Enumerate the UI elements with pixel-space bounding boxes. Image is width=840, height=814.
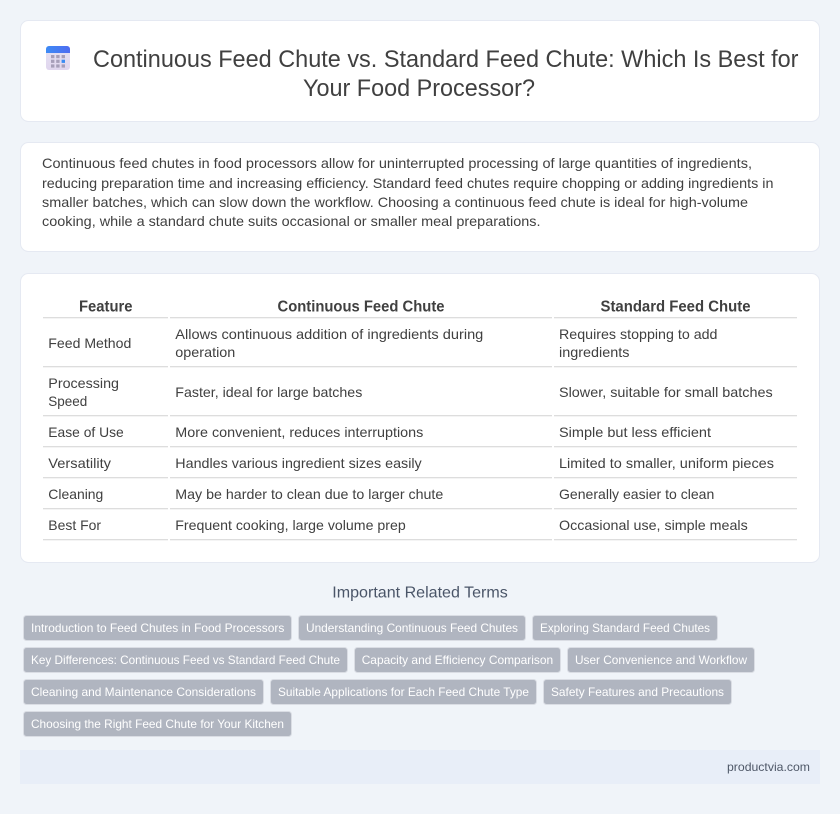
tag: Safety Features and Precautions (551, 685, 724, 699)
row: feed method: Allows continuous addition of ingredients during (175, 326, 483, 342)
text block: intro: cooking, while a standard chute suits occasional or smaller meal preparations. (42, 213, 540, 229)
row: versatility: Handles various ingredient sizes easily (175, 455, 422, 471)
text block: intro: reducing preparation time and increasing efficiency. Standard feed chutes require chopping or adding ingredients in (42, 175, 774, 191)
table header: Feature (79, 298, 133, 316)
tag (532, 616, 718, 640)
tag: Capacity and Efficiency Comparison (362, 653, 553, 667)
tag (24, 616, 292, 640)
tag: Understanding Continuous Feed Chutes (306, 621, 518, 635)
tag: Key Differences: Continuous Feed vs Standard Feed Chute (31, 653, 340, 667)
tag (354, 648, 560, 672)
heading: related terms: Important Related Terms (332, 584, 508, 602)
row: feed method: Feed Method (48, 335, 131, 351)
footer: productvia.com (727, 760, 810, 774)
row: processing speed: Slower, suitable for small batches (559, 384, 773, 400)
tag (24, 648, 348, 672)
tag (568, 648, 754, 672)
tag (298, 616, 526, 640)
panel: intro paragraph (20, 142, 820, 252)
row: best for (48, 517, 748, 533)
panel: related term tags (24, 616, 754, 736)
row: feed method: operation (175, 344, 235, 360)
row: ease of use: Simple but less efficient (559, 424, 711, 440)
row: ease of use (48, 424, 711, 440)
row: ease of use: More convenient, reduces interruptions (175, 424, 423, 440)
row: feed method: Requires stopping to add (559, 326, 718, 342)
tag (24, 680, 264, 704)
row: best for: Best For (48, 517, 101, 533)
tag: Suitable Applications for Each Feed Chute Type (278, 685, 529, 699)
tag: Choosing the Right Feed Chute for Your Kitchen (31, 717, 284, 731)
tag (544, 680, 732, 704)
row: ease of use: Ease of Use (48, 424, 124, 440)
row: processing speed (48, 375, 773, 409)
tag: Introduction to Feed Chutes in Food Processors (31, 621, 284, 635)
row: best for: Frequent cooking, large volume prep (175, 517, 406, 533)
row: best for: Occasional use, simple meals (559, 517, 748, 533)
panel: comparison table (20, 274, 820, 562)
tag: Cleaning and Maintenance Considerations (31, 685, 256, 699)
text block: intro: Continuous feed chutes in food processors allow for uninterrupted processing of large quantities of ingredients, (42, 155, 752, 171)
row: versatility (48, 455, 774, 471)
row: versatility: Limited to smaller, uniform pieces (559, 455, 774, 471)
text block: intro (42, 155, 774, 229)
tag: Exploring Standard Feed Chutes (540, 621, 710, 635)
title: Continuous Feed Chute vs. Standard Feed Chute: Which Is Best for (93, 46, 798, 73)
table header (79, 298, 751, 316)
row: feed method: ingredients (559, 344, 630, 360)
row: processing speed: Speed (48, 393, 87, 409)
title: Your Food Processor? (303, 75, 535, 102)
row: cleaning: May be harder to clean due to larger chute (175, 486, 444, 502)
table header: Standard Feed Chute (600, 298, 751, 316)
row: processing speed: Faster, ideal for large batches (175, 384, 362, 400)
row: versatility: Versatility (48, 455, 111, 471)
footer (20, 750, 820, 784)
tag (270, 680, 536, 704)
row: cleaning: Generally easier to clean (559, 486, 714, 502)
row: cleaning (48, 486, 714, 502)
table header: Continuous Feed Chute (278, 298, 445, 316)
panel: header (20, 20, 820, 122)
tag (24, 712, 292, 736)
icon: calendar grid (46, 46, 70, 70)
tag: User Convenience and Workflow (575, 653, 747, 667)
row: cleaning: Cleaning (48, 486, 103, 502)
title (93, 46, 798, 102)
row: feed method (48, 326, 718, 360)
text block: intro: smaller batches, which can slow down the workflow. Choosing a continuous feed chute is ideal for high-volume (42, 194, 748, 210)
row: processing speed: Processing (48, 375, 119, 391)
